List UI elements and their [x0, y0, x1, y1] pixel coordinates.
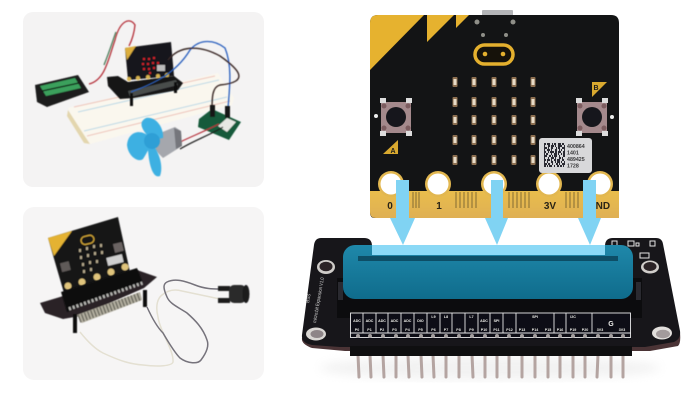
blue fan — [127, 118, 163, 176]
tilted micro:bit on expansion board — [107, 42, 183, 106]
board silk title — [305, 277, 326, 323]
pin labels: 0 — [387, 201, 393, 212]
expansion board — [302, 238, 680, 380]
motor — [155, 127, 182, 158]
gold corner marks — [370, 15, 469, 70]
pin label strip: 3V3 — [597, 328, 603, 332]
header socket — [350, 346, 632, 356]
slot connector housing — [337, 278, 642, 318]
board silk title: micro:bit Expansion V1.0 — [312, 277, 326, 323]
pin label strip: P11 — [493, 328, 500, 332]
button B marker: B — [593, 85, 599, 92]
pin row — [358, 355, 623, 377]
white and grey buzzer wires — [80, 280, 220, 366]
pin label strip: P12 — [506, 328, 513, 332]
slot highlight band — [343, 245, 633, 299]
pin label strip: P16 — [557, 328, 563, 332]
pin label strip: ADC — [378, 319, 386, 323]
pin label strip: P4 — [405, 328, 410, 332]
button B marker — [592, 82, 607, 97]
micro:bit board — [370, 10, 619, 218]
pin label strip: SPI — [532, 315, 538, 319]
pin label strip: P9 — [469, 328, 474, 332]
pin label strip — [350, 313, 631, 339]
serial label with data matrix: 1728 — [567, 164, 579, 170]
pin label strip: P6 — [431, 328, 436, 332]
breadboard — [67, 73, 234, 144]
pin label strip: P20 — [582, 328, 588, 332]
slot opening line — [358, 256, 618, 261]
arrow: left into slot — [390, 180, 415, 245]
pin label strip: P7 — [444, 328, 448, 332]
arrow: middle into slot — [485, 180, 508, 245]
pin label strip: P13 — [519, 328, 525, 332]
serial label with data matrix: 1401 — [567, 150, 579, 156]
gold pads and holes — [378, 171, 613, 197]
pin label strip: P1 — [367, 328, 372, 332]
soft shadow — [320, 356, 660, 380]
right ear silk markings — [612, 241, 655, 258]
serial label with data matrix: 489425 — [567, 157, 585, 163]
board silk title: BSS — [305, 293, 312, 303]
pin labels: 1 — [436, 201, 442, 212]
pin label strip: ADC — [366, 319, 374, 323]
USB connector — [482, 10, 513, 16]
jumper wires — [131, 42, 239, 110]
pin label strip: I2C — [570, 315, 576, 319]
pin label strip: 3V3 — [619, 328, 625, 332]
button A marker — [383, 140, 398, 155]
light band over white — [372, 245, 605, 255]
pin label strip: L9 — [431, 315, 436, 319]
arrow: right into slot — [578, 180, 601, 245]
panel: battery, breadboard and fan photo — [23, 12, 264, 187]
battery holder — [35, 75, 89, 107]
pin label strip: P2 — [380, 328, 384, 332]
buzzer — [218, 285, 250, 303]
button B — [576, 98, 614, 136]
serial label with data matrix: 400864 — [567, 144, 585, 150]
gold logo — [475, 45, 513, 64]
edge connector ticks — [413, 192, 578, 208]
pin label strip: L7 — [469, 315, 474, 319]
LED matrix — [452, 77, 536, 165]
pin label strip: P15 — [545, 328, 551, 332]
pin label strip: ADC — [353, 319, 361, 323]
black connector with pad row — [61, 268, 143, 312]
pin label strip: ADC — [404, 319, 412, 323]
pin labels: 3V — [544, 201, 556, 212]
panel: micro:bit with buzzer photo — [23, 207, 264, 380]
solder joints row — [356, 334, 625, 338]
pin label strip: ADC — [391, 319, 399, 323]
pin label strip: P10 — [481, 328, 487, 332]
pin label strip: DIO — [417, 319, 424, 323]
board body — [370, 15, 619, 218]
pin labels — [387, 201, 610, 212]
red and green battery wires — [89, 21, 135, 84]
pin label strip: G — [608, 321, 614, 328]
pin label strip: P14 — [532, 328, 538, 332]
PCB outline with ears — [302, 238, 680, 347]
pin label strip: L8 — [444, 315, 448, 319]
connector end slots — [636, 282, 641, 300]
pin label strip: P3 — [392, 328, 397, 332]
pin label strip: P8 — [456, 328, 461, 332]
mounting holes — [306, 260, 672, 340]
pin label strip: P0 — [355, 328, 359, 332]
pin label strip: ADC — [480, 319, 488, 323]
pin labels: GND — [588, 201, 610, 212]
button A marker: A — [390, 148, 396, 155]
gold edge connector strip — [370, 191, 619, 218]
pin label strip: SPI — [494, 319, 499, 323]
pin label strip: P5 — [418, 328, 423, 332]
arrows and slot highlight — [343, 180, 633, 299]
pin label strip: P19 — [570, 328, 576, 332]
PCB bottom edge — [302, 333, 680, 351]
speaker pads — [474, 20, 516, 37]
button A — [374, 98, 412, 136]
expansion board under micro:bit — [40, 270, 157, 333]
motor driver module — [180, 105, 241, 149]
serial label with data matrix — [539, 138, 592, 173]
tilted micro:bit — [48, 217, 130, 293]
